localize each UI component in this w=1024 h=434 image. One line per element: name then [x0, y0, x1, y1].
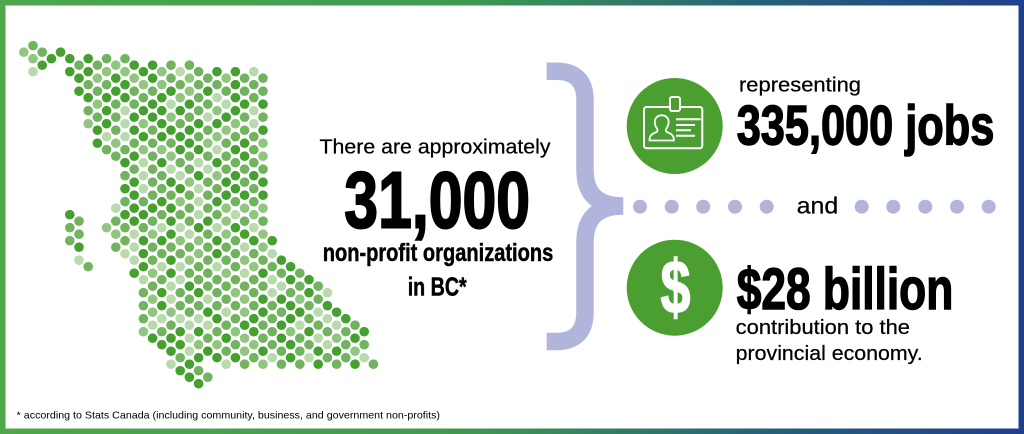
$28 billion: $28 billion	[737, 257, 953, 322]
contribution description: provincial economy.	[736, 342, 923, 365]
intro line: There are approximately	[320, 135, 551, 158]
footnote: * according to Stats Canada (including community, business, and government non-profits)	[17, 409, 440, 421]
contribution description: contribution to the	[736, 316, 910, 339]
icon: dollar sign	[627, 240, 723, 336]
centre statement text	[320, 135, 553, 302]
dot map of British Columbia	[19, 41, 378, 388]
non-profit organizations: non-profit organizations	[323, 239, 553, 267]
contribution description	[736, 316, 923, 365]
icon: id badge	[627, 78, 723, 174]
brace	[547, 71, 623, 342]
big number 31,000: 31,000	[344, 156, 530, 245]
icon: dollar sign: $	[660, 245, 690, 329]
dotted divider	[633, 200, 996, 214]
in BC: in BC*	[408, 272, 467, 302]
and label: and	[797, 192, 838, 218]
representing label: representing	[739, 74, 861, 97]
